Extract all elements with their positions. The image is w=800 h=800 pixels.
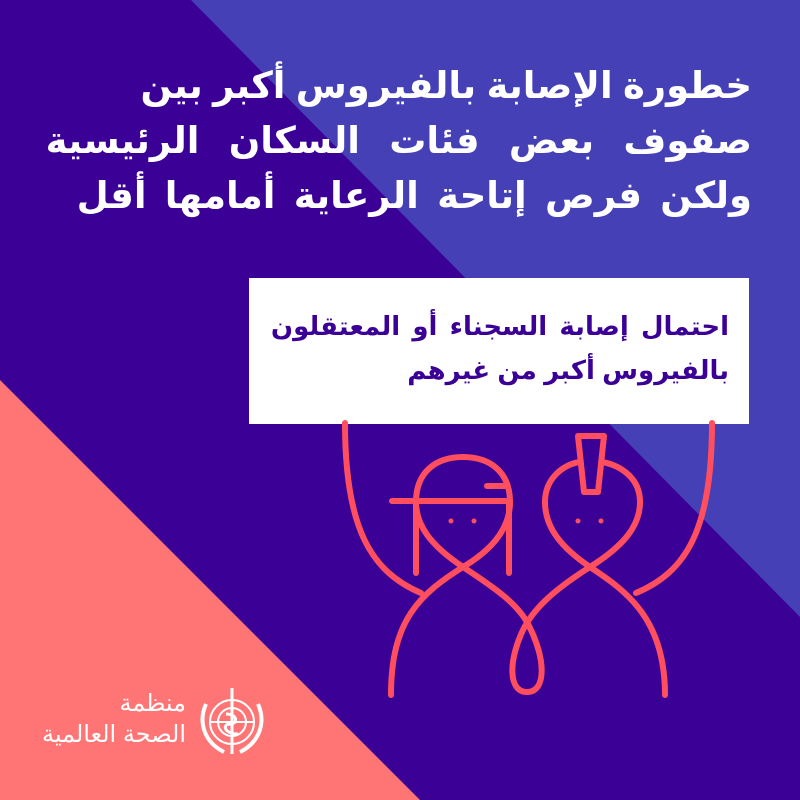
logo text (42, 690, 186, 748)
callout: sign box: بالفيروس أكبر من غيرهم (407, 355, 729, 385)
title: ولكن فرص إتاحة الرعاية أمامها أقل (77, 175, 752, 216)
title: خطورة الإصابة بالفيروس أكبر بين (141, 65, 752, 106)
icon: WHO emblem (200, 688, 264, 754)
title (46, 61, 752, 218)
logo text: الصحة العالمية (42, 721, 186, 748)
logo: WHO (42, 688, 264, 754)
logo text: منظمة (119, 690, 186, 717)
callout: sign box (249, 278, 749, 424)
title: صفوف بعض فئات السكان الرئيسية (46, 120, 752, 161)
callout: sign box: احتمال إصابة السجناء أو المعتقلون (271, 311, 729, 341)
